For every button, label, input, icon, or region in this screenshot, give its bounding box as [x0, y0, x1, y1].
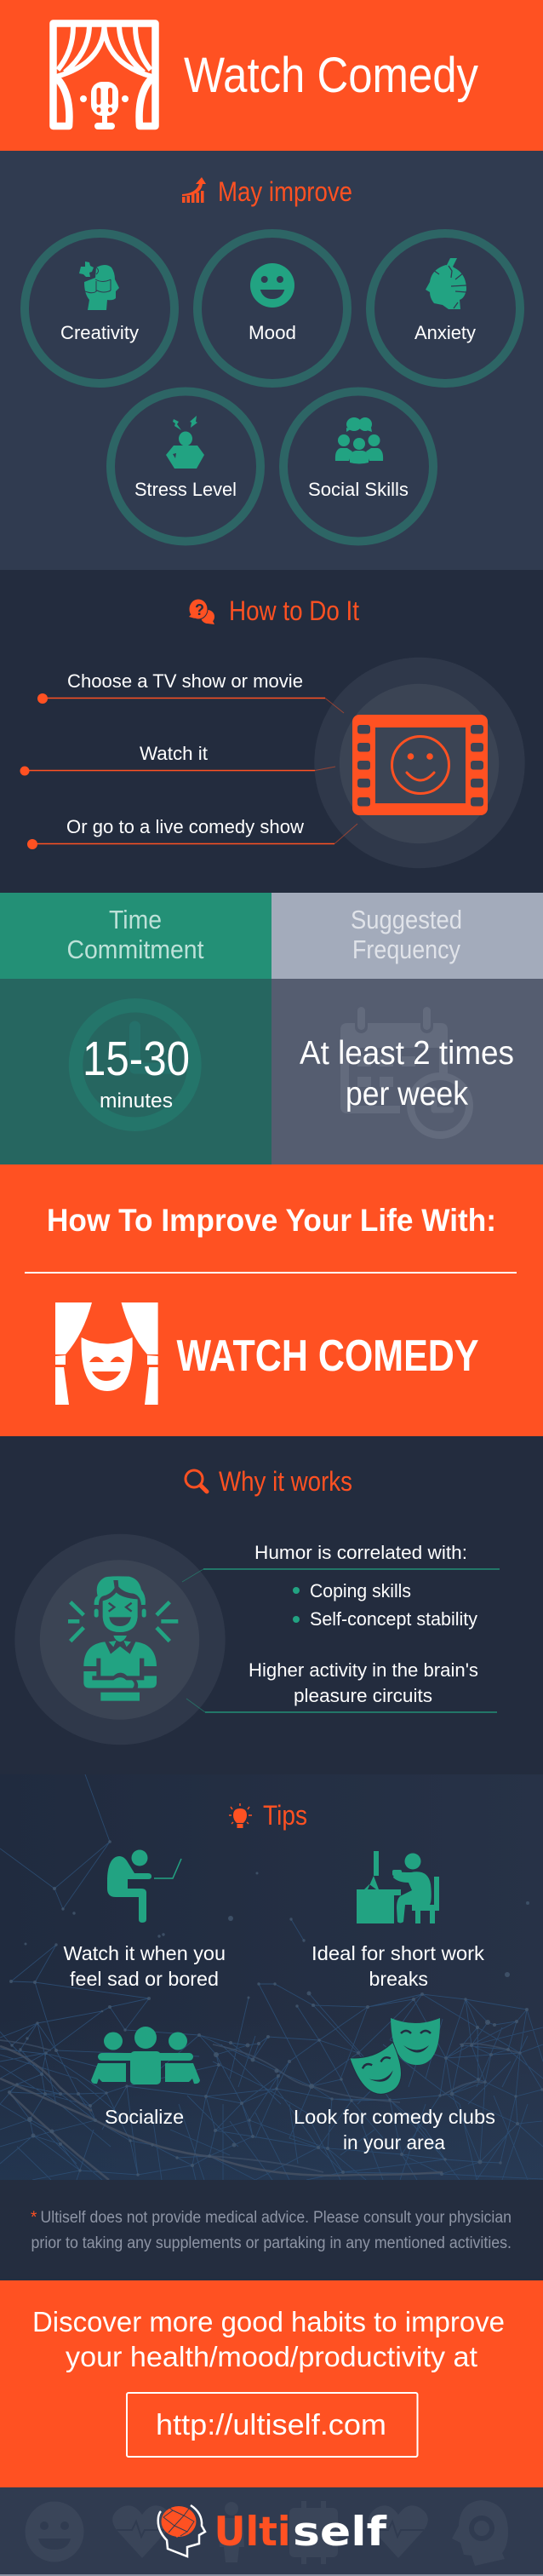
value: 15-30 minutes: minutes	[100, 1090, 173, 1113]
icon: magnifier	[186, 1470, 207, 1492]
icon: group with speech bubbles	[335, 417, 383, 463]
tip: watch when sad or bored: feel sad or bored	[70, 1968, 219, 1990]
value: at least 2 times per week: per week	[346, 1076, 468, 1113]
text: discover more: your health/mood/productivity at	[66, 2341, 477, 2372]
icon: smiley	[250, 263, 294, 308]
tip: comedy clubs	[294, 2018, 495, 2153]
heading: how to do it: How to Do It	[229, 595, 359, 626]
icon: background clock	[76, 1005, 194, 1124]
benefit: social skills	[283, 392, 433, 542]
label: Stress Level	[134, 479, 237, 500]
heading: may improve: May improve	[218, 176, 352, 207]
bullet list: Self-concept stability	[310, 1608, 477, 1630]
step: choose a show: Choose a TV show or movie	[67, 670, 303, 692]
benefit: mood	[197, 233, 347, 383]
logo: ultiself: Ulti	[214, 2509, 291, 2556]
text: discover more	[32, 2306, 505, 2372]
icon: background calendar and clock	[340, 1005, 470, 1135]
step: live comedy show	[27, 816, 357, 849]
icon backdrop circles	[314, 658, 525, 868]
heading	[351, 905, 462, 964]
heading: tips	[229, 1800, 307, 1831]
panel: how to improve your life banner	[0, 1164, 543, 1436]
callout: pleasure circuits: pleasure circuits	[294, 1685, 432, 1706]
icon: comedy masks	[350, 2018, 440, 2102]
panel: time commitment	[0, 893, 272, 1164]
panel: tips	[0, 1774, 543, 2180]
icon: rising chart arrow	[182, 177, 206, 203]
panel: disclaimer: prior to taking any supplements or partaking in any mentioned activities.	[31, 2234, 512, 2252]
callout: humor is correlated with	[182, 1542, 500, 1582]
icon backdrop circles	[14, 1534, 226, 1745]
heading: How To Improve Your Life With:	[47, 1203, 496, 1238]
icon: three friends embracing	[91, 2027, 200, 2084]
logo: ultiself: self	[293, 2509, 387, 2556]
label: Creativity	[60, 322, 139, 343]
heading: tips: Tips	[263, 1800, 307, 1831]
callout: pleasure circuits: Higher activity in the brain's	[249, 1659, 478, 1681]
value: 15-30 minutes	[83, 1032, 190, 1113]
value: at least 2 times per week	[300, 1035, 514, 1113]
panel: why it works	[0, 1436, 543, 1774]
heading: Frequency	[352, 934, 460, 964]
panel: disclaimer	[0, 2180, 543, 2280]
tip: socialize: Socialize	[105, 2106, 184, 2128]
tip: short work breaks: breaks	[369, 1968, 428, 1990]
faded background icons	[26, 2500, 508, 2566]
icon: stressed person	[166, 416, 204, 469]
panel: how to do it	[0, 570, 543, 893]
bullet list	[293, 1580, 477, 1630]
panel: may improve	[0, 151, 543, 570]
panel: footer	[0, 2487, 543, 2576]
callout: humor is correlated with: Humor is correlated with:	[254, 1542, 467, 1563]
heading: Suggested	[351, 905, 462, 934]
panel: disclaimer: Ultiself does not provide medical advice. Please consult your physician	[41, 2209, 512, 2227]
tip: short work breaks	[312, 1851, 485, 1990]
value: at least 2 times per week: At least 2 times	[300, 1035, 514, 1072]
benefit: anxiety	[370, 233, 520, 383]
panel: call to action	[0, 2280, 543, 2487]
icon: person at desk with cup	[357, 1851, 439, 1923]
benefit: creativity	[25, 233, 174, 383]
tip: watch when sad or bored	[63, 1850, 226, 1990]
heading: how to do it	[189, 595, 359, 626]
tip: socialize	[91, 2027, 200, 2128]
label: Social Skills	[308, 479, 409, 500]
icon: head with puzzle pieces	[79, 262, 119, 310]
label: Anxiety	[414, 322, 476, 343]
step: watch it	[20, 743, 335, 775]
tip: comedy clubs: in your area	[343, 2131, 445, 2153]
icon: light bulb	[229, 1803, 252, 1828]
title: Watch Comedy	[184, 48, 478, 103]
icon: stage curtain with microphone	[53, 24, 155, 129]
logo: ultiself	[158, 2505, 387, 2556]
panel: disclaimer: *	[31, 2209, 37, 2227]
text: discover more: Discover more good habits to improve	[32, 2306, 505, 2337]
icon: question speech bubbles: ?	[195, 601, 204, 618]
step: choose a show	[37, 670, 344, 713]
icon: curtains and comedy mask	[55, 1302, 158, 1405]
bullet list: Coping skills	[310, 1580, 411, 1601]
panel: header	[0, 0, 543, 151]
panel: suggested frequency	[272, 893, 543, 1164]
heading	[66, 905, 204, 964]
icon: brain head	[158, 2505, 205, 2556]
heading: watch comedy: WATCH COMEDY	[177, 1331, 478, 1381]
value: 15-30 minutes: 15-30	[83, 1032, 190, 1086]
tip: watch when sad or bored: Watch it when you	[63, 1942, 226, 1964]
step: watch it: Watch it	[140, 743, 208, 764]
icon: film strip with smiley	[352, 715, 488, 815]
tip: short work breaks: Ideal for short work	[312, 1942, 485, 1964]
icon: cracked head	[426, 258, 466, 309]
heading: Time	[109, 905, 162, 934]
callout: pleasure circuits	[186, 1659, 497, 1712]
button: url	[127, 2393, 417, 2457]
network background	[0, 1774, 543, 2180]
button: url: http://ultiself.com	[156, 2409, 386, 2441]
benefit: stress level	[111, 392, 260, 542]
step: live comedy show: Or go to a live comedy show	[66, 816, 304, 837]
heading: Commitment	[66, 934, 204, 964]
icon: laughing person	[68, 1576, 178, 1701]
icon: question speech bubbles	[189, 599, 214, 624]
tip: comedy clubs: Look for comedy clubs	[294, 2106, 495, 2128]
heading: why it works: Why it works	[219, 1466, 352, 1497]
icon: person with laptop	[107, 1850, 181, 1923]
label: Mood	[249, 322, 296, 343]
